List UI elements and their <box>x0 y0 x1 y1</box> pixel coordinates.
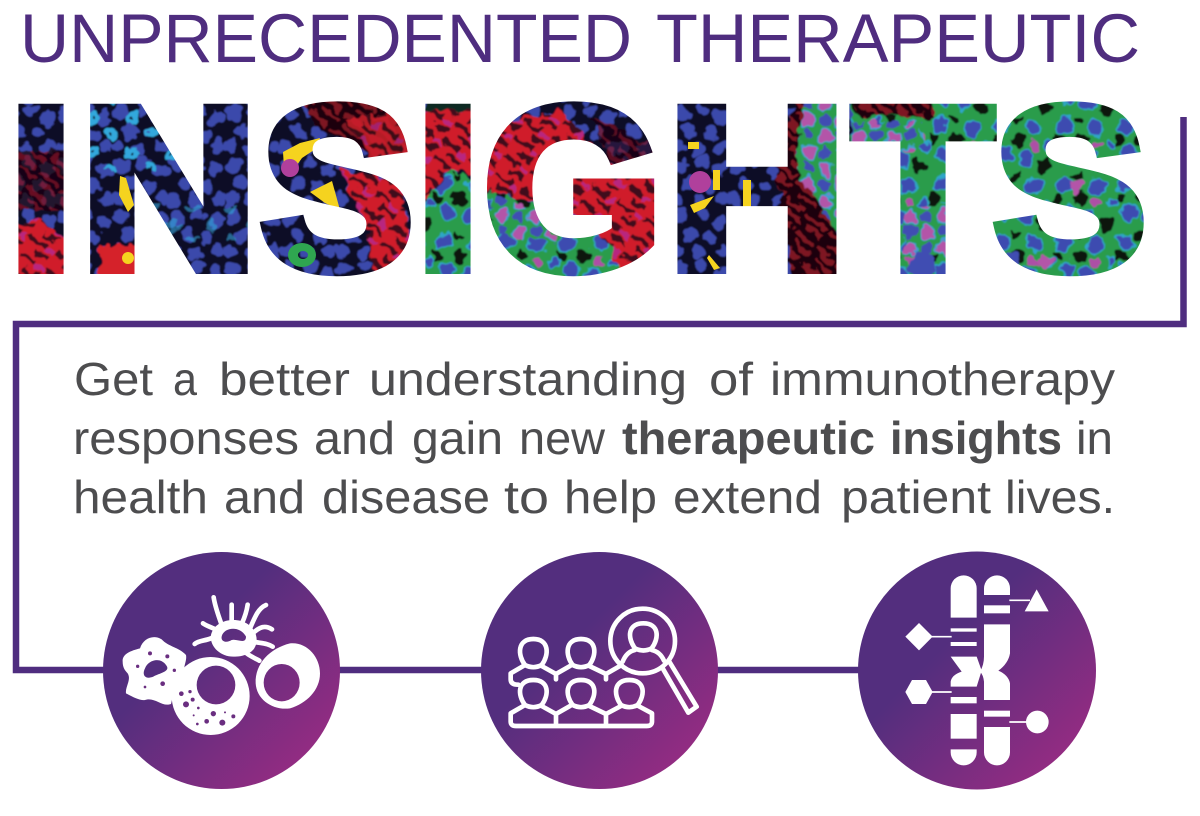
body text: a <box>173 353 197 405</box>
icon: chromosome with markers <box>858 552 1096 790</box>
title: unprecedented therapeutic: UNPRECEDENTED <box>20 0 632 77</box>
body text: understanding <box>369 353 687 405</box>
body text: Get <box>74 353 153 405</box>
right cell <box>256 643 320 709</box>
body text: disease <box>322 471 490 523</box>
body text: to <box>504 471 549 523</box>
body text: immunotherapy <box>770 353 1115 405</box>
icon: patient group under magnifying glass <box>481 552 718 789</box>
body text: responses <box>73 412 299 464</box>
ring cell <box>172 657 250 735</box>
markers <box>1025 589 1049 611</box>
body text: help <box>564 471 657 523</box>
frame line connecting the icons <box>16 117 1184 670</box>
icon: immune cells <box>103 552 340 789</box>
body text: and <box>224 471 305 523</box>
body text: and <box>314 412 395 464</box>
body text: new <box>519 412 606 464</box>
dendritic cell <box>195 597 273 661</box>
title: unprecedented therapeutic <box>20 0 1140 77</box>
left cell <box>123 637 186 705</box>
body text: gain <box>412 412 503 464</box>
body text: insights <box>890 412 1062 464</box>
body text: lives. <box>1005 471 1115 523</box>
right chromatid <box>984 575 1010 595</box>
left chromatid <box>951 575 977 618</box>
body text <box>73 353 1115 523</box>
body text: in <box>1076 412 1113 464</box>
heading: INSIGHTS with microscopy image fill <box>18 101 1144 276</box>
granule dots <box>136 651 235 726</box>
title: unprecedented therapeutic: THERAPEUTIC <box>656 0 1140 77</box>
body text: patient <box>841 471 991 523</box>
body text: extend <box>673 471 822 523</box>
body text: health <box>73 471 208 523</box>
body text: therapeutic <box>622 412 875 464</box>
body text: of <box>709 353 753 405</box>
body text: better <box>219 353 350 405</box>
